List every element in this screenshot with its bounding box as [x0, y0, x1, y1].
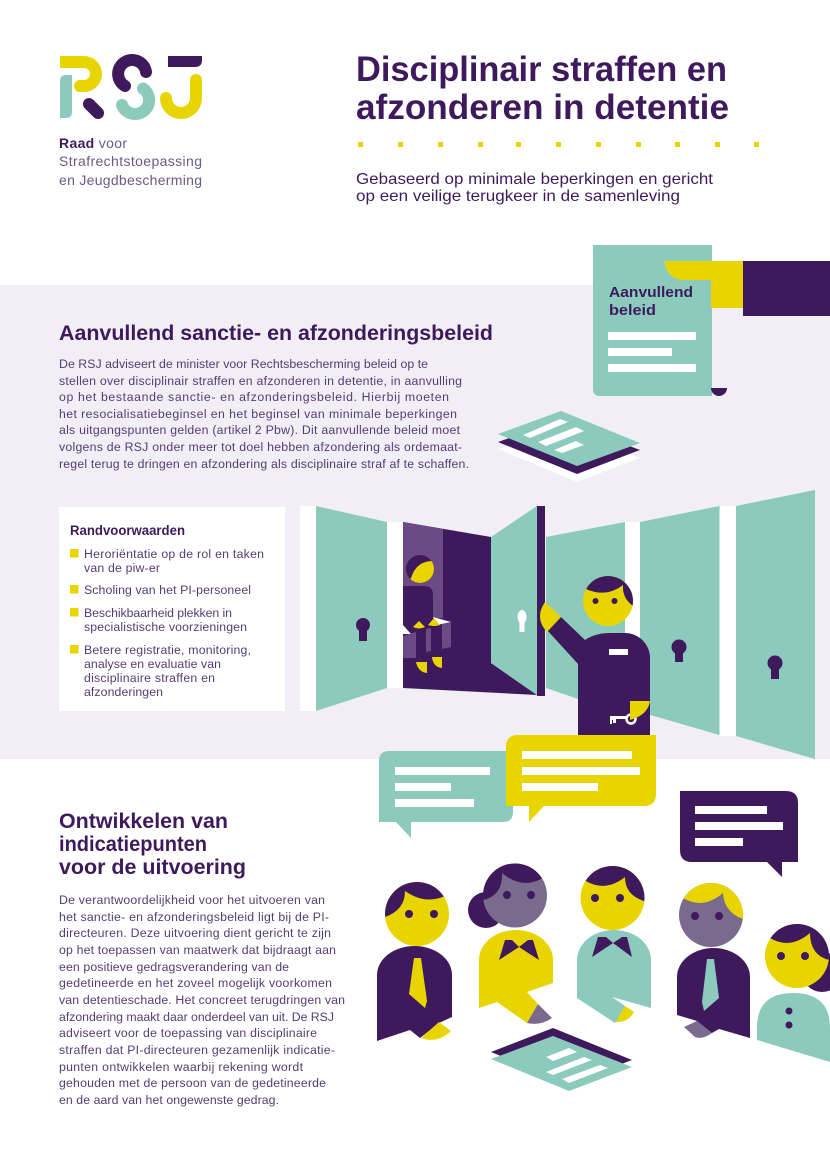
title — [356, 50, 729, 127]
illustration: policy document with hand — [593, 245, 830, 396]
subtitle — [356, 171, 714, 205]
illustration: papers on table — [491, 1028, 632, 1091]
text block: indicatiepunten: afzondering maakt daar onderdeel van uit. De RSJ — [59, 1010, 334, 1024]
text block: aanvullend beleid: De RSJ adviseert de minister voor Rechtsbescherming beleid op te — [59, 357, 428, 371]
text block: indicatiepunten: van detentieschade. Het concreet terugdringen van — [59, 993, 345, 1007]
text block: indicatiepunten: op het toepassen van maatwerk dat bijdraagt aan — [59, 943, 336, 957]
heading: Ontwikkelen van indicatiepunten: Ontwikkelen van — [59, 810, 228, 833]
panel: Randvoorwaarden: van de piw-er — [84, 561, 160, 575]
text block: indicatiepunten: gehouden met de persoon van de gedetineerde — [59, 1076, 326, 1090]
heading: Ontwikkelen van indicatiepunten: voor de uitvoering — [59, 856, 246, 879]
heading: Ontwikkelen van indicatiepunten: indicatiepunten — [59, 833, 207, 856]
logo: RSJ — [60, 56, 202, 118]
person 1: purple suit, yellow tie — [377, 875, 452, 1041]
heading: Aanvullend sanctie- en afzonderingsbeleid: Aanvullend sanctie- en afzonderingsbeleid — [59, 322, 493, 345]
text block: aanvullend beleid: volgens de RSJ onder meer tot doel hebben afzondering als ordemaat- — [59, 440, 462, 454]
text block: indicatiepunten: De verantwoordelijkheid voor het uitvoeren van — [59, 893, 325, 907]
text block: aanvullend beleid: regel terug te dringen en afzondering als disciplinaire straf af te schaffen. — [59, 457, 469, 471]
panel: Randvoorwaarden: analyse en evaluatie van — [84, 657, 221, 671]
panel: Randvoorwaarden — [59, 507, 285, 711]
panel: Randvoorwaarden: Beschikbaarheid plekken in — [84, 606, 232, 620]
text block: aanvullend beleid: het resocialisatiebeginsel en het beginsel van minimale beperkingen — [59, 407, 457, 421]
heading: Ontwikkelen van indicatiepunten — [59, 810, 246, 879]
panel: Randvoorwaarden: Betere registratie, monitoring, — [84, 643, 251, 657]
logo text — [59, 135, 202, 188]
person 4: purple suit, teal tie — [675, 878, 750, 1038]
illustration: stacked papers — [498, 411, 640, 482]
person 5: teal top with buttons — [757, 918, 830, 1062]
text block: aanvullend beleid: op het bestaande sanctie- en afzonderingsbeleid. Hierbij moeten — [59, 390, 449, 404]
text block: indicatiepunten: straffen dat PI-directeuren gezamenlijk indicatie- — [59, 1043, 335, 1057]
panel: Randvoorwaarden: Scholing van het PI-personeel — [84, 583, 251, 597]
panel: Randvoorwaarden: specialistische voorzieningen — [84, 620, 247, 634]
text block: indicatiepunten: punten ontwikkelen waarbij rekening wordt — [59, 1060, 304, 1074]
text block: aanvullend beleid — [59, 357, 469, 471]
text block: indicatiepunten: gedetineerde en het zoveel mogelijk voorkomen — [59, 976, 332, 990]
subtitle: Gebaseerd op minimale beperkingen en gericht — [356, 171, 714, 188]
speech bubble: teal — [379, 751, 513, 838]
title: afzonderen in detentie — [356, 88, 729, 127]
speech bubble: yellow — [506, 735, 656, 822]
logo text: Strafrechtstoepassing — [59, 153, 202, 169]
illustration: guard with key — [540, 570, 650, 735]
panel: Randvoorwaarden: Randvoorwaarden — [70, 523, 185, 538]
text block: aanvullend beleid: stellen over disciplinair straffen en afzonderen in detentie, in aanvulling — [59, 374, 462, 388]
text block: aanvullend beleid: als uitgangspunten gelden (artikel 2 Pbw). Dit aanvullende beleid moet — [59, 423, 461, 437]
text block: indicatiepunten: directeuren. Deze uitvoering dient gericht te zijn — [59, 926, 331, 940]
title: Disciplinair straffen en — [356, 50, 727, 89]
panel: Randvoorwaarden: Heroriëntatie op de rol en taken — [84, 547, 264, 561]
person 2: yellow jacket, bow tie, hair bun — [468, 855, 553, 1024]
illustration: cell doors — [300, 490, 815, 759]
person 3: teal jacket, bow tie — [575, 860, 651, 1023]
illustration: policy document with hand: beleid — [609, 302, 656, 319]
text block: indicatiepunten: het sanctie- en afzonderingsbeleid ligt bij de PI- — [59, 910, 329, 924]
panel: Randvoorwaarden: afzonderingen — [84, 685, 163, 699]
logo text: en Jeugdbescherming — [59, 172, 202, 188]
text block: indicatiepunten: en de aard van het ongewenste gedrag. — [59, 1093, 279, 1107]
illustration: policy document with hand: Aanvullend — [609, 284, 693, 301]
subtitle: op een veilige terugkeer in de samenleving — [356, 188, 680, 205]
logo text: Raad voor — [59, 135, 127, 151]
panel: lilac band — [0, 285, 830, 759]
text block: indicatiepunten — [59, 893, 345, 1107]
dotted rule — [358, 142, 759, 147]
speech bubble: purple — [680, 791, 798, 877]
illustration: seated detainee — [403, 552, 451, 673]
text block: indicatiepunten: adviseert voor de toepassing van disciplinaire — [59, 1026, 317, 1040]
panel: Randvoorwaarden: disciplinaire straffen en — [84, 671, 215, 685]
text block: indicatiepunten: een positieve gedragsverandering van de — [59, 960, 289, 974]
